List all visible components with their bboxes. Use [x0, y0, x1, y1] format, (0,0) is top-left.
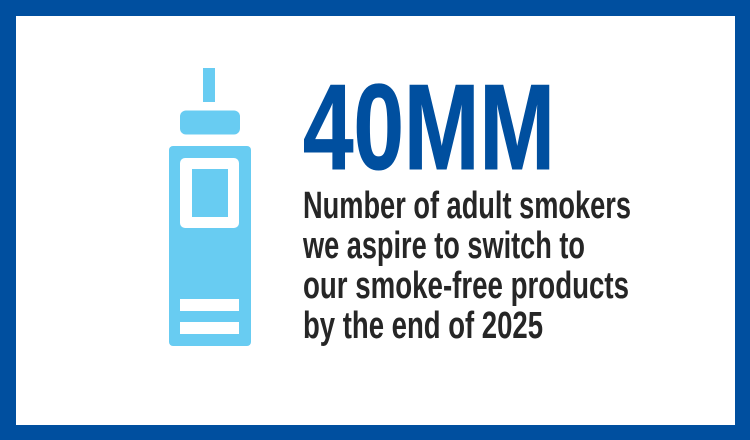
- description text: we aspire to switch to: [302, 225, 585, 267]
- icon: e-vapor device: [169, 68, 251, 346]
- headline number: 40MM: [303, 59, 555, 195]
- description text: Number of adult smokers: [303, 185, 631, 227]
- description text: our smoke-free products: [303, 265, 629, 307]
- description text: [302, 185, 631, 347]
- description text: by the end of 2025: [303, 305, 543, 347]
